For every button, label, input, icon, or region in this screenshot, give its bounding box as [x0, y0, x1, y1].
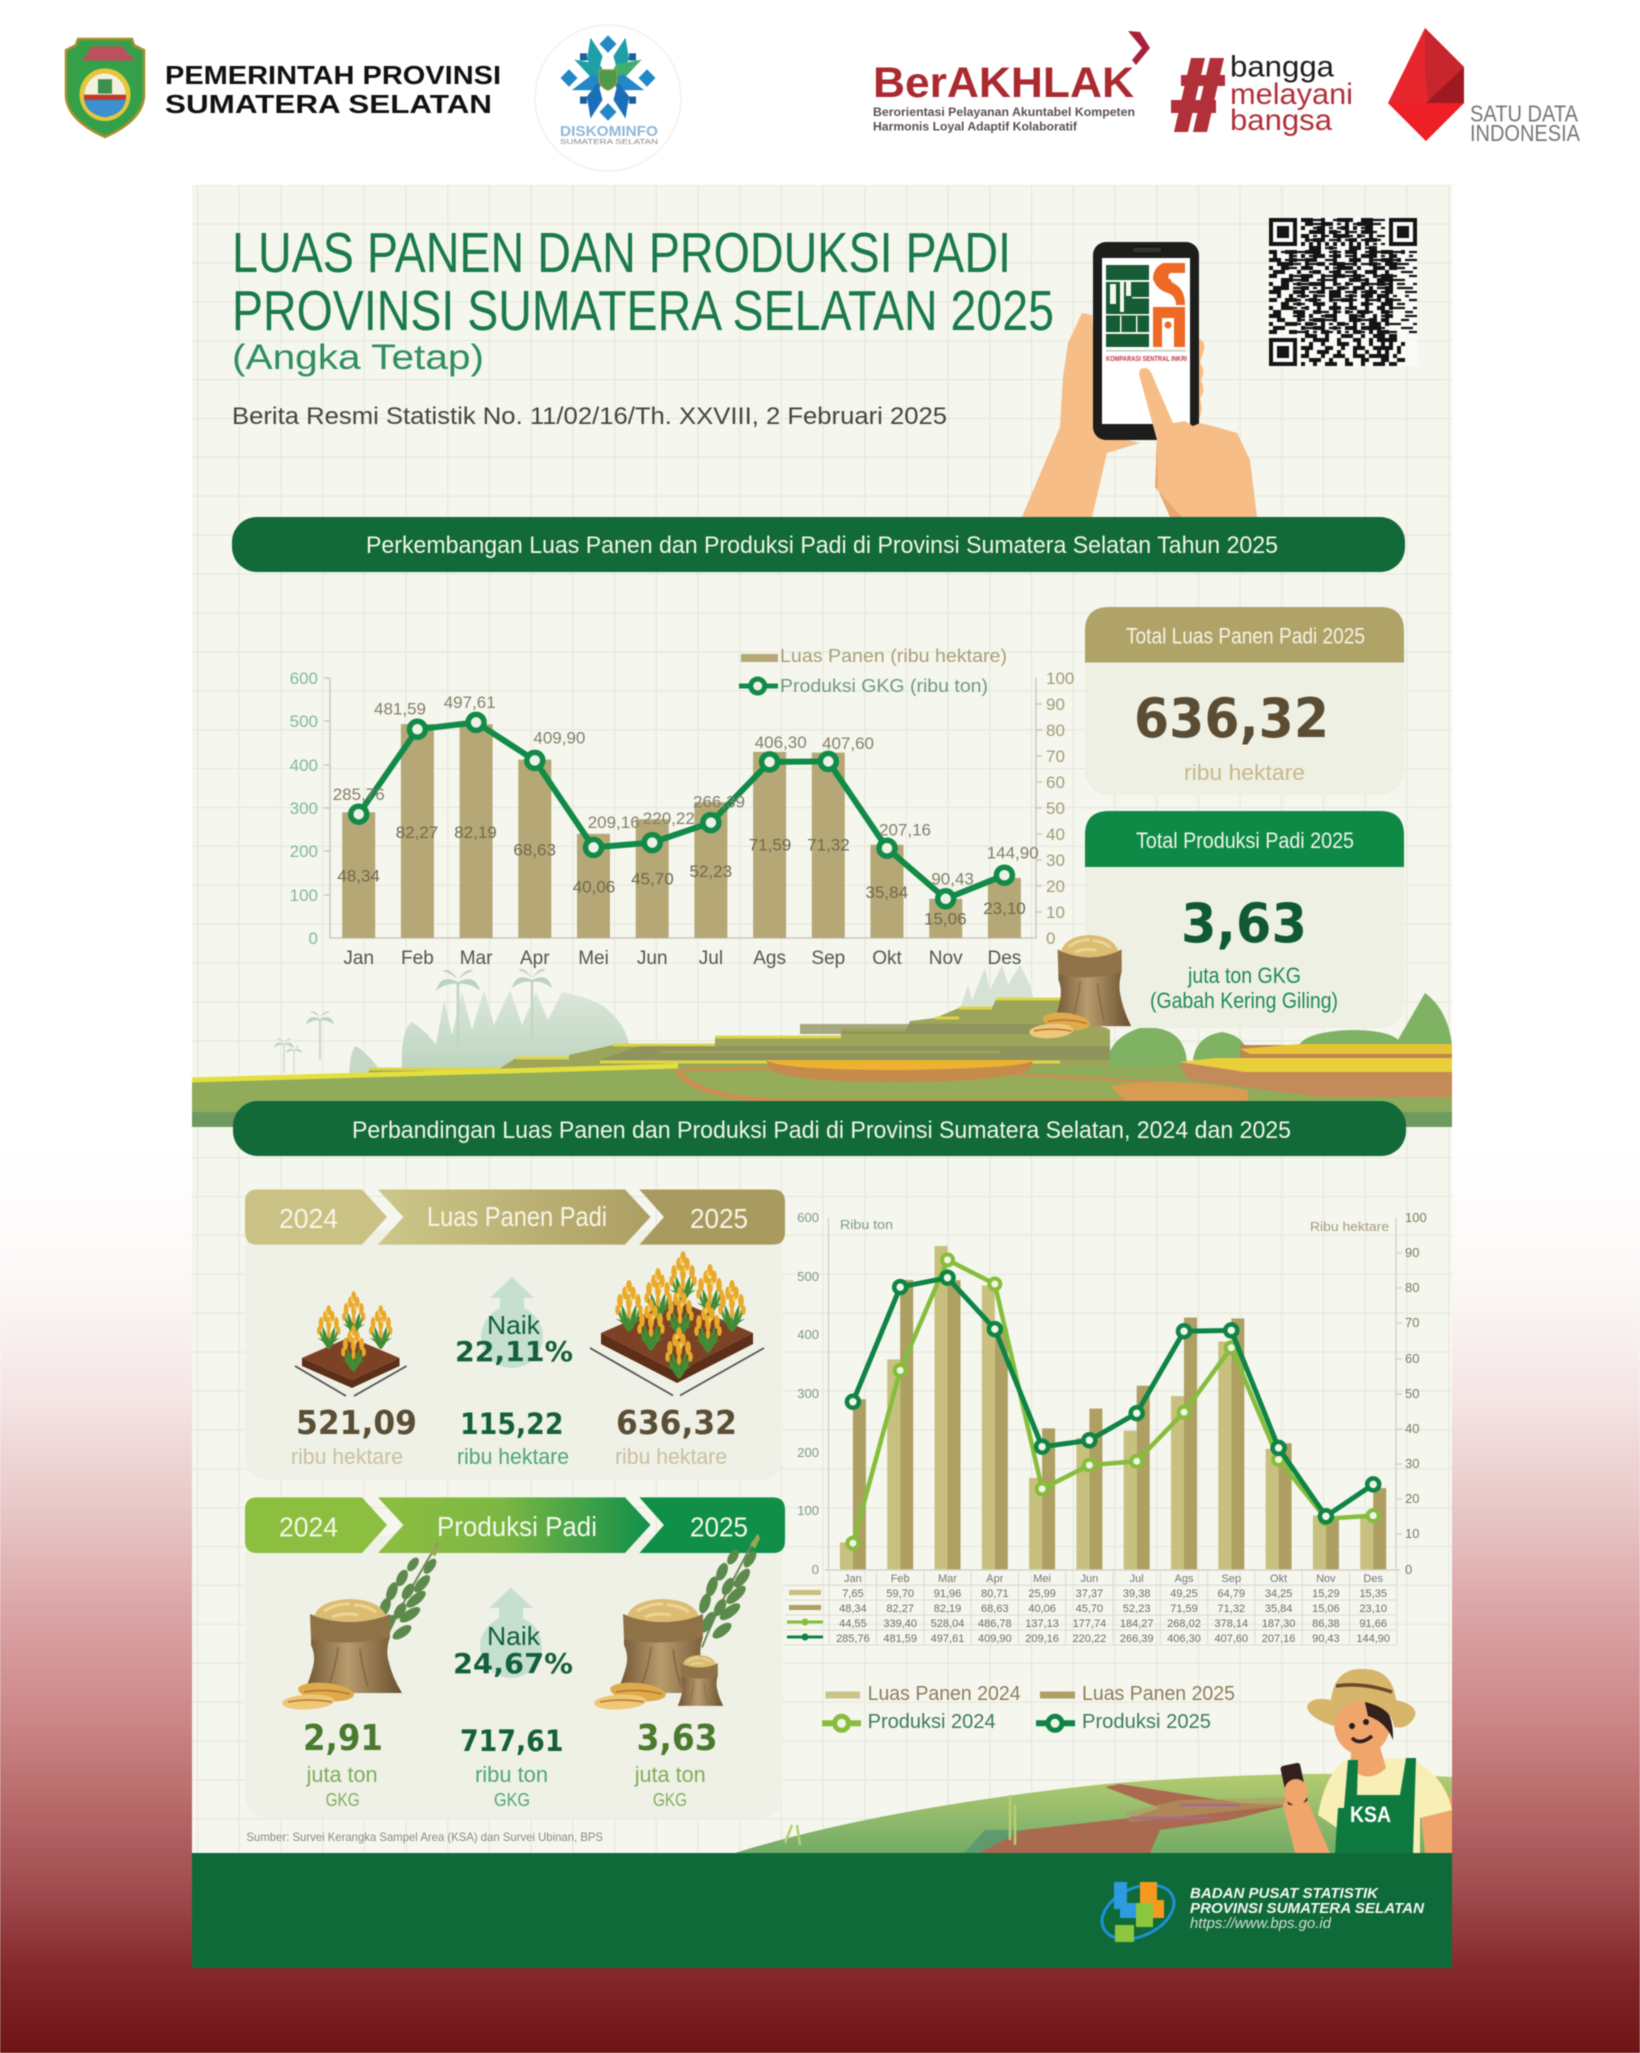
harvest value labels: 45,70	[631, 870, 674, 889]
title: PROVINSI SUMATERA SELATAN 2025	[232, 279, 1054, 343]
apron	[1335, 1758, 1416, 1853]
logo: Satu Data Indonesia: INDONESIA	[1470, 120, 1581, 146]
table row: harvest 2025: 52,23	[1123, 1603, 1150, 1615]
month labels: Apr	[520, 948, 550, 969]
table row: production 2025: 209,16	[1025, 1633, 1059, 1645]
table row: harvest 2025: 45,70	[1076, 1603, 1103, 1615]
month labels: Des	[988, 948, 1021, 969]
production value labels: 497,61	[444, 693, 496, 712]
banner: section one heading: Perkembangan Luas Panen dan Produksi Padi di Provinsi Sumatera Selatan Tahun 2025	[366, 532, 1278, 559]
month labels: Jan	[343, 948, 374, 969]
table row: harvest 2024: 91,96	[934, 1588, 961, 1600]
footer band	[192, 1853, 1452, 1968]
left axis labels: 400	[797, 1327, 819, 1342]
arrow header: production: 2025	[690, 1512, 748, 1542]
chart legend: Produksi 2024	[868, 1711, 996, 1733]
arrow header: harvest area: Luas Panen Padi	[427, 1201, 607, 1232]
logo: bangga melayani bangsa: melayani	[1230, 78, 1353, 111]
left axis labels: 100	[797, 1503, 819, 1518]
table row: production 2025: 409,90	[978, 1633, 1012, 1645]
table row: production 2024: 339,40	[883, 1618, 917, 1630]
table header: Apr	[986, 1573, 1004, 1585]
production values: 3,63	[637, 1718, 718, 1759]
harvest value labels: 71,32	[807, 835, 850, 854]
logo: Diskominfo: SUMATERA SELATAN	[560, 139, 658, 146]
data table	[785, 1570, 1397, 1645]
icon: increase arrow	[480, 1588, 542, 1678]
left axis labels: 0	[309, 929, 318, 948]
right axis labels: 0	[1046, 929, 1055, 948]
production value labels: 220,22	[643, 809, 695, 828]
month labels: Okt	[872, 948, 902, 969]
left axis labels: 500	[797, 1269, 819, 1284]
right axis labels	[1046, 669, 1074, 948]
table row: production 2024: 177,74	[1073, 1618, 1106, 1630]
harvest value labels: 52,23	[690, 862, 732, 881]
axis titles: Ribu ton	[840, 1218, 893, 1232]
table row: harvest 2025: 71,59	[1170, 1603, 1198, 1615]
production values: juta ton	[634, 1762, 706, 1787]
harvest value labels: 40,06	[573, 877, 615, 896]
production value labels: 409,90	[533, 728, 585, 748]
harvest area values	[291, 1403, 737, 1469]
table row: production 2024: 486,78	[978, 1618, 1012, 1630]
title: LUAS PANEN DAN PRODUKSI PADI	[232, 221, 1011, 285]
arrow header: production: 2024	[279, 1512, 338, 1542]
app logo	[1106, 263, 1187, 363]
right axis labels: 30	[1046, 851, 1065, 870]
production line 2024	[847, 1254, 1379, 1549]
harvest value labels: 15,06	[924, 910, 967, 929]
table row: harvest 2024: 25,99	[1028, 1588, 1056, 1600]
right axis labels: 100	[1405, 1210, 1427, 1225]
production value labels: 144,90	[987, 844, 1039, 862]
left axis labels: 400	[290, 756, 318, 775]
increase percentage	[455, 1310, 573, 1368]
logo: BPS	[1093, 1874, 1183, 1950]
table row: harvest 2024: 15,29	[1312, 1588, 1340, 1600]
harvest value labels: 71,59	[749, 835, 791, 854]
month labels: Ags	[753, 948, 786, 969]
table row: production 2025: 497,61	[931, 1633, 964, 1645]
logo: bangga melayani bangsa: bangga	[1230, 50, 1334, 84]
increase percentage: Naik	[487, 1621, 541, 1651]
phone	[1093, 242, 1199, 440]
right axis labels: 10	[1046, 903, 1065, 922]
hat	[1307, 1669, 1415, 1728]
harvest value labels: 82,19	[454, 823, 497, 842]
right axis labels: 60	[1405, 1351, 1419, 1366]
main infographic panel	[192, 185, 1452, 1853]
production values: GKG	[494, 1790, 530, 1810]
harvest area values: ribu hektare	[615, 1444, 727, 1469]
logo: bangga melayani bangsa: bangsa	[1230, 104, 1332, 137]
left axis labels: 300	[797, 1386, 819, 1401]
table header: Okt	[1270, 1573, 1287, 1585]
card: total harvest area	[1085, 607, 1404, 795]
table row: production 2025: 207,16	[1262, 1633, 1295, 1645]
table header: Jul	[1130, 1573, 1144, 1585]
harvest value labels: 48,34	[337, 867, 380, 886]
right axis labels: 30	[1405, 1456, 1419, 1471]
table row: production 2025: 406,30	[1167, 1633, 1201, 1645]
production value labels: 407,60	[822, 734, 874, 753]
table row: harvest 2025: 82,27	[886, 1603, 914, 1615]
table row: harvest 2024: 80,71	[981, 1588, 1009, 1600]
table row: harvest 2024: 37,37	[1076, 1588, 1103, 1600]
month labels: Nov	[929, 948, 963, 969]
stepped terraces	[263, 998, 1110, 1097]
chart: comparison 2024 and 2025	[785, 1210, 1427, 1733]
table row: production 2024: 86,38	[1312, 1618, 1340, 1630]
table row: production 2024: 91,66	[1359, 1618, 1387, 1630]
right axis labels: 70	[1405, 1315, 1419, 1330]
right axis labels: 10	[1405, 1526, 1419, 1541]
table header	[844, 1573, 1383, 1585]
table row: production 2025: 285,76	[836, 1633, 870, 1645]
source note: Sumber: Survei Kerangka Sampel Area (KSA) dan Survei Ubinan, BPS	[246, 1830, 603, 1844]
left axis labels: 200	[797, 1445, 819, 1460]
left axis labels	[290, 669, 318, 948]
left axis labels: 600	[797, 1210, 819, 1225]
increase percentage	[453, 1621, 573, 1680]
axis titles	[840, 1218, 1389, 1234]
BPS agency text	[1190, 1885, 1425, 1932]
logo: Pemerintah Provinsi Sumatera Selatan: PEMERINTAH PROVINSI	[165, 60, 501, 90]
arrow header: harvest area: 2025	[690, 1203, 748, 1234]
left axis labels: 0	[812, 1562, 819, 1577]
left axis labels: 600	[290, 669, 318, 688]
right axis labels: 100	[1046, 669, 1074, 688]
month labels: Sep	[811, 948, 845, 969]
illustration: rice terraces	[192, 965, 1452, 1127]
icon: rice sack 2025	[594, 1534, 760, 1711]
table header: Mei	[1033, 1573, 1051, 1585]
harvest area values: 115,22	[460, 1407, 564, 1441]
arrow header: harvest area: 2024	[279, 1203, 338, 1234]
right axis labels: 60	[1046, 773, 1065, 792]
right axis labels: 50	[1405, 1386, 1419, 1401]
table header: Des	[1363, 1573, 1383, 1585]
chart: monthly harvest area and production 2025	[290, 646, 1074, 969]
app logo: KOMPARASI SENTRAL INKRI	[1106, 356, 1187, 363]
left axis labels	[797, 1210, 819, 1577]
right axis labels: 40	[1046, 825, 1065, 844]
left axis labels: 100	[290, 886, 318, 905]
banner: section two heading	[233, 1101, 1406, 1156]
right axis labels: 50	[1046, 799, 1065, 818]
table row: production 2024: 268,02	[1167, 1618, 1201, 1630]
logo: bangga melayani bangsa	[1171, 50, 1353, 137]
table row: harvest 2025: 40,06	[1028, 1603, 1056, 1615]
month labels: Jun	[637, 948, 668, 969]
neck	[1350, 1740, 1386, 1776]
legend	[739, 646, 1007, 696]
illustration: farmer with phone: KSA	[1350, 1802, 1391, 1827]
table row: production 2024: 137,13	[1025, 1618, 1059, 1630]
icon: small rice field	[295, 1291, 407, 1396]
axes	[324, 678, 1042, 938]
table row: production 2025: 481,59	[883, 1633, 917, 1645]
arms	[1283, 1790, 1330, 1853]
month labels: Feb	[401, 948, 434, 969]
production value labels: 266,39	[693, 792, 745, 812]
chart legend	[822, 1683, 1235, 1733]
table row: production 2024: 44,55	[839, 1618, 867, 1630]
card: total production: juta ton GKG	[1187, 963, 1301, 988]
BPS agency text: PROVINSI SUMATERA SELATAN	[1190, 1900, 1425, 1917]
chart legend: Luas Panen 2024	[868, 1683, 1021, 1705]
bushes	[1106, 993, 1452, 1067]
increase percentage: Naik	[487, 1310, 541, 1340]
table row: production 2025	[836, 1633, 1390, 1645]
production values: juta ton	[306, 1762, 378, 1787]
harvest value labels: 35,84	[866, 883, 908, 902]
field and lower bands	[192, 1060, 1452, 1127]
harvest value labels: 82,27	[396, 823, 438, 842]
production value labels: 406,30	[755, 733, 807, 752]
arrow header: harvest area	[245, 1190, 785, 1245]
table row: harvest 2024: 49,25	[1170, 1588, 1198, 1600]
production values: 2,91	[303, 1718, 383, 1759]
logo: BerAKHLAK: BerAKHLAK	[873, 59, 1134, 107]
production values: 717,61	[460, 1724, 564, 1758]
logo: Diskominfo: DISKOMINFO	[560, 123, 658, 140]
card: total production	[1085, 811, 1404, 1028]
harvest bars 2025	[853, 1280, 1386, 1569]
right axis labels: 90	[1405, 1245, 1419, 1260]
right axis labels: 70	[1046, 747, 1065, 766]
right axis labels: 80	[1405, 1280, 1419, 1295]
logo: BerAKHLAK: Harmonis Loyal Adaptif Kolaboratif	[873, 122, 1077, 134]
table row: production 2024	[839, 1618, 1387, 1630]
right axis labels: 20	[1046, 877, 1065, 896]
production value labels: 207,16	[879, 820, 931, 840]
card: total harvest area: ribu hektare	[1184, 760, 1305, 785]
right axis labels: 0	[1405, 1562, 1412, 1577]
subtitle: (Angka Tetap)	[232, 338, 484, 377]
table header: Nov	[1316, 1573, 1336, 1585]
table row: harvest 2024: 64,79	[1218, 1588, 1245, 1600]
table row: harvest 2024: 34,25	[1265, 1588, 1292, 1600]
icon: rice sack	[1029, 935, 1131, 1039]
increase percentage: 22,11%	[455, 1335, 573, 1368]
icon: QR code	[1269, 218, 1417, 366]
logo: BerAKHLAK	[873, 31, 1150, 134]
harvest area values: ribu hektare	[291, 1444, 403, 1469]
table row: harvest 2025: 35,84	[1265, 1603, 1292, 1615]
banner: section one heading	[232, 517, 1405, 572]
icon: large rice field	[590, 1251, 764, 1396]
publication reference: Berita Resmi Statistik No. 11/02/16/Th. XXVIII, 2 Februari 2025	[232, 403, 947, 430]
increase percentage: 24,67%	[453, 1647, 573, 1680]
panel: production comparison	[245, 1497, 785, 1818]
left axis labels: 500	[290, 712, 318, 731]
table row: harvest 2025: 68,63	[981, 1603, 1009, 1615]
table header: Jun	[1081, 1573, 1098, 1585]
production value labels	[333, 693, 1039, 888]
table row: production 2024: 184,27	[1120, 1618, 1154, 1630]
card: total harvest area: Total Luas Panen Padi 2025	[1126, 624, 1365, 648]
panel: harvest area comparison	[245, 1190, 785, 1480]
BPS agency text: https://www.bps.go.id	[1190, 1915, 1332, 1932]
logo: Satu Data Indonesia	[1388, 28, 1581, 146]
table row: harvest 2024: 59,70	[886, 1588, 914, 1600]
table header: Jan	[844, 1573, 862, 1585]
table row: harvest 2024: 39,38	[1123, 1588, 1150, 1600]
harvest area values: ribu hektare	[457, 1444, 569, 1469]
legend: Produksi GKG (ribu ton)	[780, 676, 988, 696]
production values: GKG	[326, 1790, 360, 1810]
right axis labels: 20	[1405, 1491, 1419, 1506]
table row: production 2025: 266,39	[1120, 1633, 1154, 1645]
harvest bars 2024	[840, 1246, 1373, 1569]
card: total production: 3,63	[1181, 892, 1307, 955]
logo: Pemerintah Provinsi Sumatera Selatan	[66, 39, 501, 137]
table row: harvest 2025: 23,10	[1359, 1603, 1387, 1615]
harvest area bars	[342, 724, 1021, 938]
production value labels: 209,16	[588, 813, 640, 832]
production line 2025	[847, 1272, 1379, 1522]
table row: harvest 2025: 15,06	[1312, 1603, 1340, 1615]
table row: harvest 2025: 48,34	[839, 1603, 867, 1615]
table row: harvest 2025: 82,19	[934, 1603, 961, 1615]
harvest area values: 636,32	[616, 1403, 737, 1442]
production values: ribu ton	[475, 1762, 548, 1787]
table header: Sep	[1222, 1573, 1241, 1585]
harvest area values: 521,09	[296, 1403, 417, 1442]
right axis labels: 40	[1405, 1421, 1419, 1436]
chart legend: Produksi 2025	[1082, 1711, 1211, 1733]
icon: rice sack 2024	[282, 1543, 440, 1711]
card: total production: (Gabah Kering Giling)	[1150, 988, 1338, 1013]
table row keys	[787, 1590, 823, 1640]
table header: Feb	[891, 1573, 910, 1585]
right axis labels	[1405, 1210, 1427, 1577]
illustration: field with path	[735, 1774, 1452, 1853]
icon: hands holding phone	[1022, 242, 1257, 517]
arrow header: production	[245, 1497, 785, 1553]
curved plots	[674, 1044, 1452, 1103]
harvest value labels: 68,63	[513, 841, 556, 860]
production line	[351, 714, 1012, 907]
right axis labels: 80	[1046, 721, 1065, 740]
card: total production: Total Produksi Padi 2025	[1136, 828, 1354, 853]
production values	[303, 1718, 718, 1810]
production value labels: 90,43	[931, 870, 974, 888]
left axis labels: 200	[290, 842, 318, 861]
illustration: farmer with phone	[1280, 1669, 1452, 1853]
table row: harvest 2025: 71,32	[1218, 1603, 1245, 1615]
logo: Satu Data Indonesia: SATU DATA	[1470, 100, 1579, 126]
card: total harvest area: 636,32	[1134, 687, 1329, 750]
right axis labels: 90	[1046, 695, 1065, 714]
month labels: Mei	[578, 948, 609, 969]
table header: Ags	[1175, 1573, 1194, 1585]
axes	[825, 1218, 1402, 1570]
harvest value labels	[337, 823, 1026, 929]
legend: Luas Panen (ribu hektare)	[780, 646, 1007, 666]
table header: Mar	[938, 1573, 957, 1585]
table row: production 2024: 528,04	[931, 1618, 964, 1630]
production values: GKG	[653, 1790, 687, 1810]
icon: increase arrow	[481, 1277, 543, 1368]
chart legend: Luas Panen 2025	[1082, 1683, 1235, 1705]
month labels: Mar	[460, 948, 493, 969]
month labels: Jul	[699, 948, 723, 969]
harvest value labels: 23,10	[983, 899, 1026, 918]
shirt	[1318, 1758, 1452, 1853]
head	[1334, 1693, 1390, 1755]
arrow header: production: Produksi Padi	[437, 1511, 597, 1542]
production value labels: 481,59	[374, 700, 426, 718]
table row: harvest 2024: 7,65	[842, 1588, 864, 1600]
axis titles: Ribu hektare	[1310, 1220, 1389, 1234]
table row: harvest 2025	[839, 1603, 1387, 1615]
table row: production 2024: 378,14	[1214, 1618, 1248, 1630]
table row: harvest 2024: 15,35	[1359, 1588, 1387, 1600]
table row: production 2025: 144,90	[1356, 1633, 1390, 1645]
table row: production 2025: 220,22	[1073, 1633, 1106, 1645]
banner: section two heading: Perbandingan Luas Panen dan Produksi Padi di Provinsi Sumatera Selatan, 2024 dan 2025	[352, 1117, 1291, 1144]
table row: harvest 2024	[842, 1588, 1387, 1600]
table row: production 2025: 90,43	[1312, 1633, 1340, 1645]
logo: Diskominfo	[535, 25, 681, 171]
logo: Pemerintah Provinsi Sumatera Selatan: SUMATERA SELATAN	[165, 89, 492, 119]
title	[232, 221, 1054, 343]
table row: production 2024: 187,30	[1262, 1618, 1295, 1630]
month labels	[343, 948, 1021, 969]
background hills and palms	[274, 965, 1037, 1077]
left axis labels: 300	[290, 799, 318, 818]
table row: production 2025: 407,60	[1214, 1633, 1248, 1645]
phone and hand	[1280, 1762, 1308, 1806]
logo: BerAKHLAK: Berorientasi Pelayanan Akuntabel Kompeten	[873, 107, 1135, 119]
BPS agency text: BADAN PUSAT STATISTIK	[1190, 1885, 1379, 1902]
production value labels: 285,76	[333, 785, 385, 804]
